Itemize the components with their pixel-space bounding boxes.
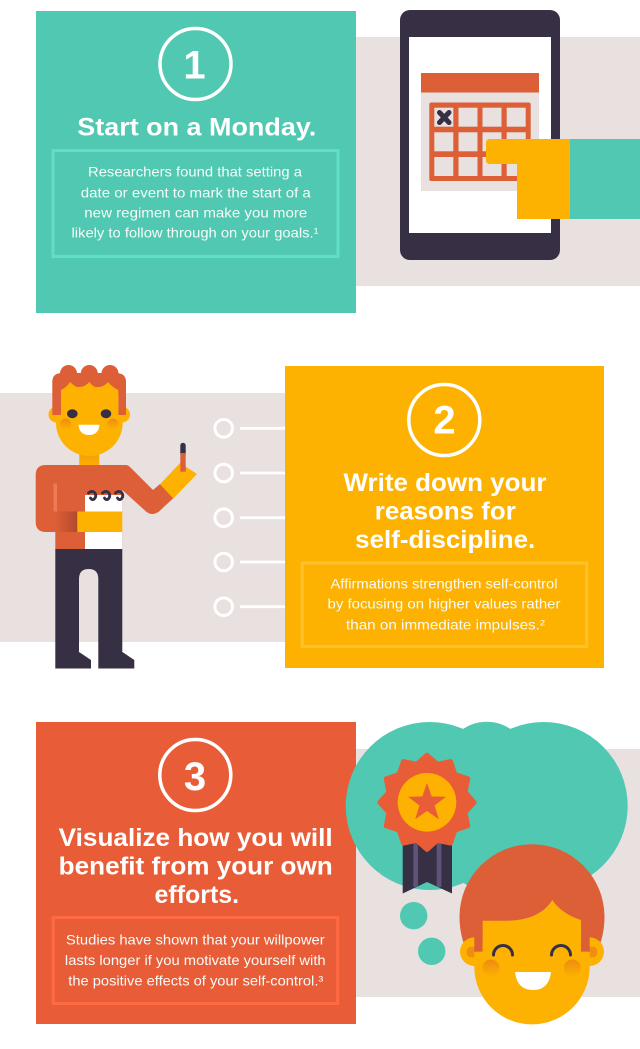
hair (460, 844, 604, 952)
text box: step 3 (53, 918, 338, 1004)
number badge 1: 1 (183, 44, 206, 88)
notebook spiral (88, 492, 123, 500)
face (56, 382, 123, 456)
text box: step 2: than on immediate impulses.² (346, 616, 545, 632)
trousers (55, 549, 122, 652)
icon: calendar (421, 73, 539, 191)
background band: section 2 (0, 393, 285, 642)
neck (79, 450, 99, 467)
text box: step 2: Affirmations strengthen self-control (330, 575, 558, 591)
hand on notebook (77, 512, 122, 532)
number badge 2: 2 (433, 398, 456, 442)
illustration: man with notebook (36, 365, 197, 668)
text box: step 1: date or event to mark the start of a (81, 184, 311, 200)
raised hand (160, 463, 197, 498)
number badge 3: 3 (184, 755, 206, 799)
heading: step 2 (344, 469, 547, 554)
number badge 3 (160, 740, 231, 810)
cheeks (482, 960, 500, 976)
ears (48, 406, 64, 422)
ears (460, 937, 489, 966)
panel: step 2 (285, 366, 604, 668)
heading: step 1: Start on a Monday. (77, 114, 316, 142)
shoes (55, 652, 134, 668)
background band: section 1 (356, 37, 640, 286)
ribbon (403, 840, 452, 894)
background band: section 3 (356, 749, 640, 997)
cheeks (60, 418, 71, 430)
heading: step 2: Write down your (344, 469, 547, 497)
number badge 1 (160, 28, 231, 100)
icon: pointing hand (486, 139, 640, 219)
icon: tablet with calendar (400, 10, 560, 260)
smile (78, 425, 100, 435)
heading: step 3: Visualize how you will (59, 824, 333, 852)
number badge 2 (409, 384, 480, 456)
eyes (494, 946, 570, 955)
sleeve shadow (55, 512, 77, 532)
panel: step 1 (36, 11, 356, 313)
eyes (67, 409, 78, 418)
text box: step 1: new regimen can make you more (84, 205, 308, 221)
thought bubble (346, 722, 628, 965)
panel: step 3 (36, 722, 356, 1024)
sideburns (474, 930, 590, 952)
icon: medal (380, 755, 474, 894)
text box: step 3: the positive effects of your self-control.³ (68, 973, 324, 989)
text box: step 1 (53, 150, 338, 256)
curly hair (52, 365, 126, 415)
heading: step 3: benefit from your own (59, 853, 333, 881)
smile (515, 972, 551, 990)
text box: step 1: Researchers found that setting a (88, 164, 302, 180)
illustration: smiling boy (460, 844, 604, 1024)
heading: step 3 (59, 824, 333, 909)
text box: step 2: by focusing on higher values rather (328, 596, 561, 612)
text box: step 3: lasts longer if you motivate yourself with (65, 952, 326, 968)
text box: step 3: Studies have shown that your willpower (66, 931, 325, 947)
text box: step 2 (302, 563, 587, 646)
heading: step 2: self-discipline. (355, 526, 535, 554)
sleeve highlight (54, 484, 57, 512)
heading: step 2: reasons for (375, 498, 516, 526)
text box: step 1: likely to follow through on your goals.¹ (72, 225, 319, 241)
pencil (180, 443, 186, 472)
checklist (215, 420, 285, 616)
heading: step 3: efforts. (155, 881, 239, 909)
notebook (85, 495, 122, 549)
face (474, 900, 590, 1024)
sweater (36, 465, 174, 549)
